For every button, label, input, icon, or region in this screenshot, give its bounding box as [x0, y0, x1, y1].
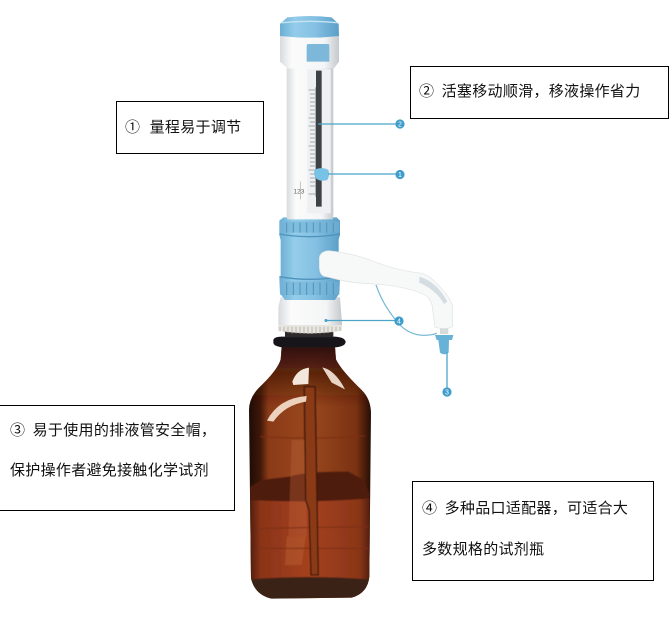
- blue cap: [280, 16, 339, 38]
- white bottle adapter: [278, 297, 342, 330]
- callout marker 2: [318, 119, 405, 129]
- callout marker 1: 1: [398, 172, 402, 179]
- callout marker 4: [324, 316, 404, 326]
- callout marker 3: 3: [445, 390, 449, 396]
- callout text 2: ② 活塞移动顺滑，移液操作省力: [419, 80, 641, 101]
- callout text 3: ③ 易于使用的排液管安全帽，: [10, 419, 216, 440]
- callout text 4: 多数规格的试剂瓶: [422, 538, 544, 559]
- callout text 4: [422, 497, 628, 559]
- black slot: [316, 71, 322, 207]
- amber reagent bottle: [245, 331, 375, 600]
- safety cap: [435, 335, 453, 354]
- callout box 2: piston movement: [410, 66, 669, 119]
- callout text 4: ④ 多种品口适配器，可适合大: [422, 497, 628, 518]
- adjustment thumb slider: [314, 168, 329, 181]
- callout text 3: [10, 419, 216, 480]
- callout marker 1: [328, 170, 405, 179]
- pump upper body and adjustment cap: [280, 16, 339, 219]
- pump body lower blue collar and white adapter: [278, 217, 453, 354]
- callout box 1: scale adjustment: [116, 101, 264, 154]
- volume scale: [309, 87, 315, 197]
- callout marker 4: 4: [397, 318, 401, 326]
- white barrel: [287, 63, 333, 219]
- small printed label: 123: [293, 188, 305, 195]
- discharge arm: [319, 251, 453, 329]
- callout marker 3: [442, 352, 452, 397]
- drain hose: [376, 285, 437, 335]
- callout text 3: 保护操作者避免接触化学试剂: [10, 459, 209, 480]
- callout box 3: safety cap: [0, 405, 235, 511]
- callout marker 2: 2: [398, 122, 402, 128]
- dispenser on bottle illustration: [249, 16, 454, 599]
- blue collar: [279, 217, 340, 300]
- callout box 4: bottle adapters: [412, 481, 654, 581]
- white upper collar: [280, 35, 339, 68]
- blue window: [307, 44, 329, 62]
- callout text 1: ① 量程易于调节: [125, 116, 241, 137]
